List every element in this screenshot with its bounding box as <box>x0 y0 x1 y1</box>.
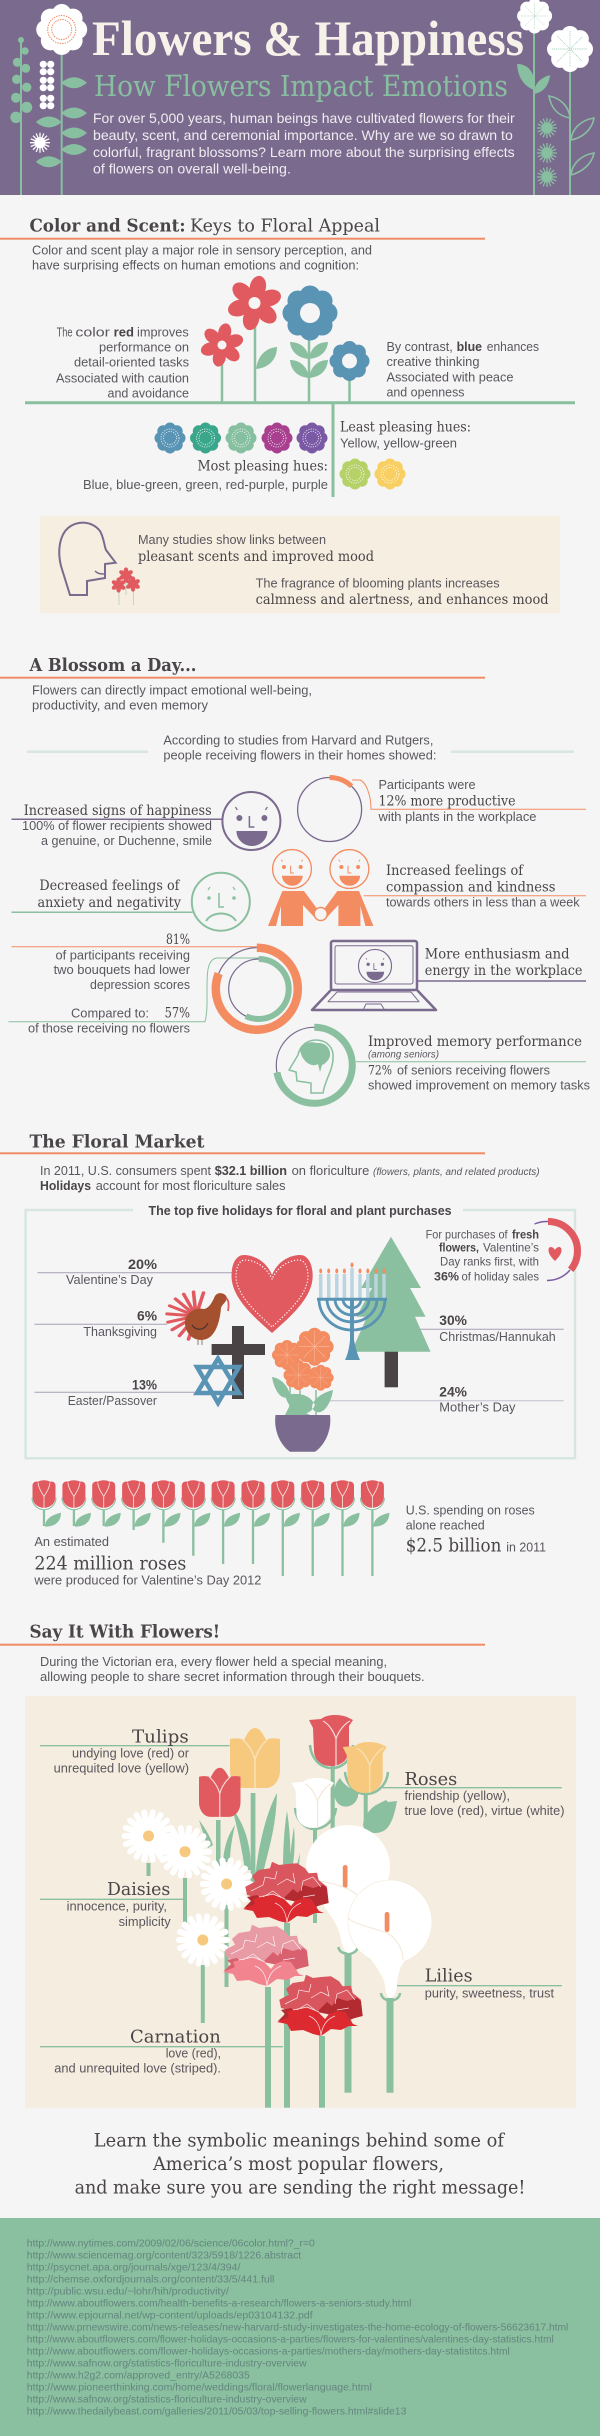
label: lilies: Lilies <box>425 1966 473 1987</box>
title: Flowers & Happiness <box>92 10 524 66</box>
icon: small red flower <box>196 319 248 371</box>
stat: depression scores: 81% <box>166 932 190 948</box>
closing message: Learn the symbolic meanings behind some of <box>94 2130 506 2152</box>
closing message: America’s most popular flowers, <box>152 2153 444 2175</box>
text: red effects: color <box>75 325 111 340</box>
stat: depression scores: Compared to: <box>71 1006 149 1021</box>
text: color and scent intro <box>32 242 372 272</box>
text: 224 million roses: 224 million roses <box>34 1552 186 1574</box>
label: daisies: simplicity <box>119 1914 171 1929</box>
text: floral market intro: on floriculture <box>292 1163 369 1178</box>
heading: the floral market: The Floral Market <box>30 1132 205 1153</box>
panel: sources footer: http://www.thedailybeast.com/galleries/2011/05/03/top-selling-flowers.html#slide13 <box>27 2407 407 2418</box>
text: blue effects: creative thinking <box>386 354 480 369</box>
intro paragraph: of flowers on overall well-being. <box>93 160 291 176</box>
intro paragraph <box>93 110 515 176</box>
label: valentine's day: 20% <box>128 1256 158 1272</box>
stat: depression scores <box>8 932 298 1036</box>
callout: valentine's fresh flowers: Day ranks first, with <box>440 1255 539 1269</box>
label: roses: Roses <box>404 1769 457 1790</box>
stat: compassion: Increased feelings of <box>386 863 525 879</box>
label: thanksgiving: Thanksgiving <box>83 1324 157 1339</box>
panel: scent <box>40 516 560 613</box>
panel: sources footer: http://psycnet.apa.org/journals/xge/123/4/394/ <box>27 2263 241 2274</box>
label: roses: friendship (yellow), <box>404 1788 510 1803</box>
label: daisies: innocence, purity, <box>67 1899 167 1914</box>
stat: memory: (among seniors) <box>368 1050 439 1061</box>
text: red effects: and avoidance <box>108 385 189 400</box>
stat: happiness: a genuine, or Duchenne, smile <box>41 833 212 848</box>
panel: sources footer: http://www.sciencemag.org/content/323/5918/1226.abstract <box>27 2251 301 2262</box>
icon: calla lilies <box>306 1825 432 1998</box>
label: christmas and hannukah: Christmas/Hannukah <box>439 1329 556 1344</box>
label: tulips: Tulips <box>132 1726 189 1747</box>
icon: roses <box>292 1715 388 1829</box>
label: christmas and hannukah: 30% <box>439 1312 468 1328</box>
heading: color and scent: Keys to Floral Appeal <box>190 216 380 237</box>
chart: row of twelve roses <box>32 1480 389 1576</box>
icon: large red flower <box>221 270 288 336</box>
stat: memory: 72% <box>368 1063 392 1078</box>
stat: compassion: towards others in less than a week <box>386 895 580 910</box>
label: daisies: Daisies <box>107 1879 170 1900</box>
callout: valentine's fresh flowers: flowers, <box>439 1241 479 1255</box>
label: tulips: unrequited love (yellow) <box>54 1761 189 1776</box>
label: mother's day: Mother’s Day <box>439 1400 516 1415</box>
callout: valentine's fresh flowers: Valentine’s <box>483 1241 539 1255</box>
label: easter and passover: Easter/Passover <box>68 1393 158 1408</box>
text: color and scent intro: have surprising effects on human emotions and cognition: <box>32 257 359 272</box>
text: floral market intro <box>40 1163 540 1193</box>
heading: color and scent <box>0 216 485 240</box>
text: blossom intro: productivity, and even memory <box>32 697 208 712</box>
panel: sources footer: http://www.epjournal.net/wp-content/uploads/ep03104132.pdf <box>27 2311 313 2322</box>
text: least pleasing hues: Least pleasing hues: <box>340 420 471 436</box>
text: 224 million roses: An estimated <box>34 1534 109 1549</box>
decorative plants left <box>10 4 87 195</box>
text: 224 million roses: were produced for Valentine’s Day 2012 <box>33 1572 261 1587</box>
text: fragrance: calmness and alertness, and enhances mood <box>256 592 549 608</box>
icon: two people holding hands <box>268 850 373 926</box>
icon: potted flowers <box>272 1328 334 1452</box>
text: red effects: Associated with caution <box>56 370 189 385</box>
label: valentine's day <box>38 1256 232 1287</box>
stat: enthusiasm <box>312 941 586 1010</box>
stat: memory <box>276 1027 590 1103</box>
text: scents and mood: Many studies show links between <box>138 532 326 547</box>
stat: compassion <box>268 850 586 926</box>
stat: memory: of seniors receiving flowers <box>397 1062 550 1077</box>
panel title: The top five holidays for floral and plant purchases <box>148 1204 452 1218</box>
text: red effects: improves <box>137 325 189 340</box>
text: blossom intro: Flowers can directly impact emotional well-being, <box>32 682 312 697</box>
heading: say it with flowers: Say It With Flowers! <box>30 1621 220 1642</box>
icon: head smelling flowers <box>59 523 141 605</box>
label: carnation: Carnation <box>130 2027 221 2048</box>
closing message: and make sure you are sending the right message! <box>75 2176 525 2198</box>
callout: valentine's fresh flowers: 36% <box>434 1270 459 1284</box>
icon: daisies <box>124 1812 251 1964</box>
icon: christmas tree <box>352 1237 430 1387</box>
text: red effects: detail-oriented tasks <box>74 355 189 370</box>
icon: heart <box>232 1255 313 1333</box>
text: red effects: red <box>114 325 134 340</box>
garden of red and blue flowers <box>196 270 370 403</box>
text: victorian intro <box>40 1654 425 1684</box>
stat: anxiety: Decreased feelings of <box>39 878 181 894</box>
text: floral market intro: account for most floriculture sales <box>96 1178 286 1193</box>
stat: happiness: Increased signs of happiness <box>24 803 212 819</box>
subtitle: How Flowers Impact Emotions <box>94 69 508 103</box>
text: blossom intro <box>32 682 312 712</box>
callout: valentine's fresh flowers: For purchases of <box>426 1227 508 1241</box>
label: roses: true love (red), virtue (white) <box>404 1803 564 1818</box>
panel: top five holidays <box>26 1204 578 1458</box>
label: carnation: love (red), <box>166 2046 221 2061</box>
text: fragrance: The fragrance of blooming plants increases <box>256 575 500 590</box>
panel: language of flowers <box>25 1696 576 2108</box>
panel: sources footer: http://public.wsu.edu/~lohr/hih/productivity/ <box>27 2287 229 2298</box>
stat: enthusiasm: More enthusiasm and <box>425 946 570 962</box>
panel: sources footer: http://chemse.oxfordjournals.org/content/33/5/441.full <box>27 2275 274 2286</box>
text: blue effects: and openness <box>386 385 465 400</box>
text: harvard and rutgers: people receiving flowers in their homes showed: <box>163 747 436 762</box>
callout: valentine's fresh flowers: of holiday sales <box>462 1270 539 1284</box>
stems and leaves <box>146 1765 397 2108</box>
decorative plants right <box>517 0 594 195</box>
label: carnation: and unrequited love (striped). <box>54 2061 221 2076</box>
stat: depression scores: two bouquets had lower <box>54 962 191 977</box>
label: tulips: undying love (red) or <box>72 1746 190 1761</box>
text: harvard and rutgers: According to studies from Harvard and Rutgers, <box>163 732 433 747</box>
text: red effects: The <box>57 325 73 340</box>
intro paragraph: beauty, scent, and ceremonial importance. Why are we so drawn to <box>93 127 513 143</box>
icon: cross <box>212 1326 265 1399</box>
panel: sources footer: http://www.aboutflowers.com/health-benefits-a-research/flowers-a-seniors-study.html <box>27 2299 411 2310</box>
text: least pleasing hues <box>340 420 471 451</box>
stat: memory: Improved memory performance <box>368 1034 582 1050</box>
label: daisies <box>40 1879 185 1929</box>
text: 2.5 billion spending: U.S. spending on roses <box>406 1502 535 1517</box>
label: lilies: purity, sweetness, trust <box>425 1986 554 2001</box>
stat: compassion: compassion and kindness <box>386 880 556 896</box>
text: red effects <box>56 325 189 400</box>
text: least pleasing hues: Yellow, yellow-green <box>340 436 457 451</box>
label: roses <box>383 1769 564 1818</box>
label: thanksgiving: 6% <box>137 1308 158 1324</box>
label: tulips <box>40 1726 230 1776</box>
chart: 81 percent and 57 percent rings <box>216 948 298 1030</box>
stat: depression scores: of those receiving no flowers <box>28 1021 190 1036</box>
stat: memory: showed improvement on memory tasks <box>368 1077 590 1092</box>
stat: anxiety: anxiety and negativity <box>38 895 181 911</box>
panel: sources footer: http://www.aboutflowers.com/flower-holidays-occasions-a-parties/mothers-day/mothers-day-statistitcs.html <box>27 2347 510 2358</box>
least pleasing hues flowers <box>340 458 406 490</box>
most pleasing hues flowers <box>154 422 328 454</box>
text: 2.5 billion spending: alone reached <box>406 1517 485 1532</box>
text: blue effects: Associated with peace <box>386 370 514 385</box>
text: blue effects <box>386 339 539 400</box>
text: floral market intro: (flowers, plants, and related products) <box>373 1167 540 1178</box>
label: christmas and hannukah <box>416 1312 564 1344</box>
closing message <box>75 2130 525 2198</box>
panel: header <box>0 0 600 195</box>
stat: depression scores: of participants receiving <box>56 947 190 962</box>
text: 2.5 billion spending: $2.5 billion <box>406 1535 501 1557</box>
label: carnation <box>40 2027 283 2076</box>
heading: color and scent: Color and Scent: <box>30 216 186 237</box>
text: 2.5 billion spending: in 2011 <box>506 1540 546 1555</box>
stat: happiness <box>12 792 280 850</box>
text: blue effects: enhances <box>487 339 539 354</box>
text: most pleasing hues: Blue, blue-green, green, red-purple, purple <box>83 477 328 492</box>
text: floral market intro: $32.1 billion <box>215 1163 287 1178</box>
text: fragrance <box>256 575 549 608</box>
icon: small blue flower <box>330 341 370 381</box>
chart: 72 percent ring with head <box>276 1027 352 1103</box>
stat: productivity ring: with plants in the workplace <box>378 809 536 824</box>
text: 224 million roses <box>33 1534 261 1587</box>
panel: sources footer: http://www.pioneerthinking.com/home/weddings/floral/flowerlanguage.html <box>27 2383 372 2394</box>
stat: productivity ring: 12% more productive <box>378 794 516 810</box>
label: lilies <box>397 1966 562 2001</box>
icon: large blue flower <box>282 286 338 340</box>
label: easter and passover: 13% <box>132 1376 157 1392</box>
stat: happiness: 100% of flower recipients showed <box>22 818 212 833</box>
panel: sources footer: http://www.nytimes.com/2009/02/06/science/06color.html?_r=0 <box>27 2239 315 2250</box>
stat: depression scores: 57% <box>165 1006 190 1022</box>
stat: productivity ring <box>298 777 586 842</box>
panel: sources footer: http://www.prnewswire.com/news-releases/new-harvard-study-investigates-the-home-ecology-of-flowers-56623617.html <box>27 2323 568 2334</box>
text: scents and mood <box>138 532 374 565</box>
stat: enthusiasm: energy in the workplace <box>425 963 582 979</box>
text: blue effects: blue <box>457 339 482 354</box>
text: scents and mood: pleasant scents and improved mood <box>138 549 374 565</box>
text: victorian intro: allowing people to share secret information through their bouquets. <box>40 1669 425 1684</box>
label: thanksgiving <box>34 1308 167 1339</box>
stat: depression scores: depression scores <box>90 977 190 992</box>
label: mother's day <box>329 1384 564 1415</box>
text: floral market intro: In 2011, U.S. consumers spent <box>40 1163 211 1178</box>
callout: valentine's fresh flowers <box>426 1221 578 1284</box>
icon: turkey <box>167 1292 229 1345</box>
icon: carnations <box>223 1862 363 2036</box>
text: color and scent intro: Color and scent play a major role in sensory perception, and <box>32 242 372 257</box>
callout: valentine's fresh flowers: fresh <box>512 1227 539 1241</box>
label: easter and passover <box>34 1376 196 1408</box>
stat: productivity ring: Participants were <box>378 777 476 792</box>
stat: anxiety <box>12 873 250 931</box>
label: mother's day: 24% <box>439 1384 468 1400</box>
icon: happy face <box>222 792 280 850</box>
heading: a blossom a day: A Blossom a Day... <box>29 655 196 676</box>
text: floral market intro: Holidays <box>40 1178 91 1193</box>
icon: laptop with happy face <box>312 941 436 1010</box>
icon: star of david <box>197 1358 239 1403</box>
ground line and divider <box>25 403 575 497</box>
intro paragraph: colorful, fragrant blossoms? Learn more about the surprising effects <box>93 144 515 160</box>
panel: sources footer <box>0 2218 600 2436</box>
text: red effects: performance on <box>99 340 189 355</box>
panel: sources footer: http://www.h2g2.com/approved_entry/A5268035 <box>27 2371 250 2382</box>
text: blue effects: By contrast, <box>386 339 453 354</box>
text: 2.5 billion spending <box>406 1502 546 1557</box>
text: victorian intro: During the Victorian era, every flower held a special meaning, <box>40 1654 387 1669</box>
text: harvard and rutgers <box>27 732 574 762</box>
intro paragraph: For over 5,000 years, human beings have cultivated flowers for their <box>93 110 515 126</box>
text: most pleasing hues: Most pleasing hues: <box>198 459 328 475</box>
label: valentine's day: Valentine’s Day <box>66 1272 153 1287</box>
panel: sources footer: http://www.safnow.org/statistics-floriculture-industry-overview <box>27 2359 307 2370</box>
panel: sources footer: http://www.aboutflowers.com/flower-holidays-occasions-a-parties/flowers-for-valentines/valentines-day-statistics.html <box>27 2335 554 2346</box>
icon: yellow and red tulips <box>199 1728 280 1817</box>
icon: menorah <box>317 1262 387 1360</box>
text: most pleasing hues <box>83 459 328 492</box>
panel: sources footer: http://www.safnow.org/statistics-floriculture-industry-overview <box>27 2395 307 2406</box>
icon: sad face <box>192 873 250 931</box>
